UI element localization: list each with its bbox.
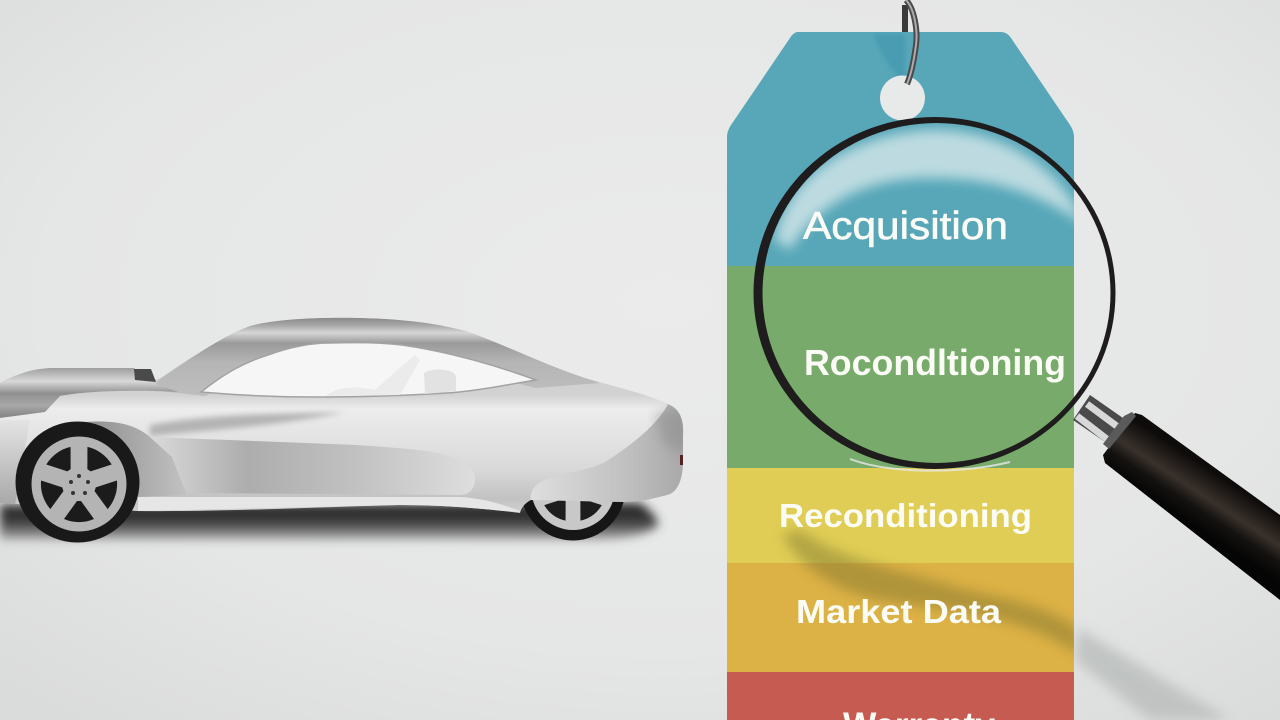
roof arch xyxy=(150,318,600,396)
hood band xyxy=(0,368,178,418)
car seat xyxy=(424,370,456,394)
door panel xyxy=(150,437,475,495)
fold shade near ring xyxy=(875,34,905,76)
tail light xyxy=(680,455,683,465)
handle xyxy=(1103,413,1280,600)
cowl vents xyxy=(134,369,156,382)
rim glint xyxy=(850,459,1010,471)
shoulder shading xyxy=(150,412,345,436)
price tag xyxy=(727,30,1080,720)
label: Reconditioning: Reconditioning xyxy=(779,497,1032,534)
lens text: Rocondltioning: Rocondltioning xyxy=(804,342,1066,383)
ground shadow xyxy=(0,503,658,540)
wheel lug nuts xyxy=(69,474,90,495)
side window xyxy=(201,343,536,397)
magnifying glass xyxy=(754,117,1280,600)
sill xyxy=(138,497,522,512)
lower left body shade xyxy=(0,429,28,504)
tag bands xyxy=(727,30,1080,720)
magnifier shadow on tag xyxy=(782,530,1080,655)
label: Market Data: Market Data xyxy=(796,593,1002,630)
collar xyxy=(1103,412,1136,449)
car xyxy=(0,315,690,542)
hanging ring xyxy=(902,0,917,84)
lens text: Acquisition: Acquisition xyxy=(803,205,1008,248)
shadow of magnifier on background xyxy=(1075,628,1230,720)
car body xyxy=(0,315,690,515)
lens rim xyxy=(754,117,1116,469)
lens highlight xyxy=(775,130,1085,250)
ferrule xyxy=(1073,395,1136,449)
rear quarter xyxy=(531,404,690,505)
front fender shade xyxy=(85,422,187,497)
front wheel xyxy=(16,422,140,542)
rear wheel xyxy=(520,436,626,540)
tag hole xyxy=(880,76,925,120)
